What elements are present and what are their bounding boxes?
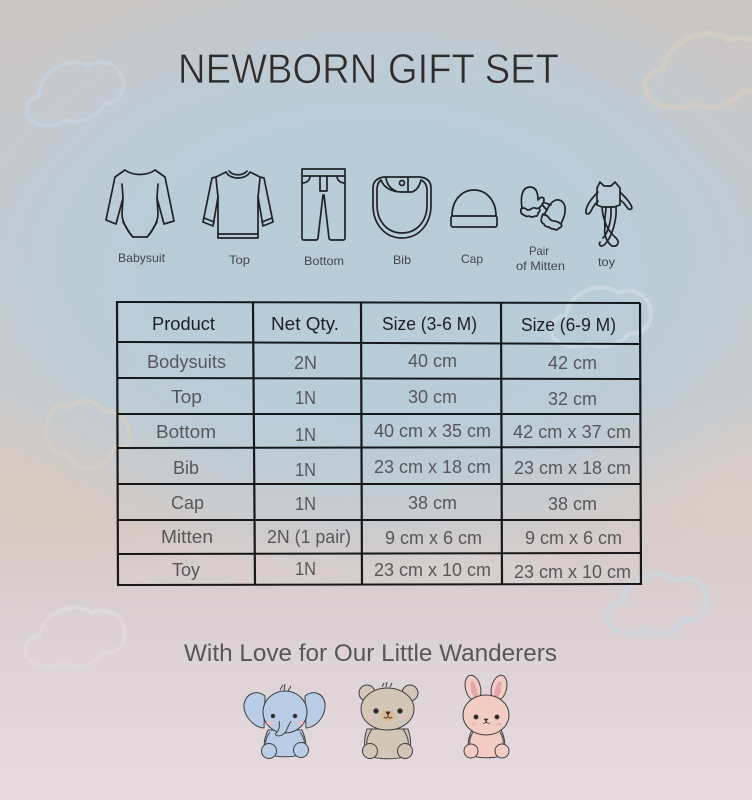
table row: Bib — [173, 457, 631, 480]
table row: Mitten: Mitten — [161, 527, 213, 547]
label: Bottom: Bottom — [304, 254, 344, 268]
table row: Bodysuits: 42 cm — [548, 353, 597, 373]
table row: Bib: Bib — [173, 458, 199, 478]
table row: Bottom: Bottom — [156, 422, 216, 442]
table row: Bib: 1N — [295, 460, 316, 480]
label: Pair of Mitten: of Mitten — [516, 259, 565, 273]
table row: Bottom: 1N — [295, 425, 316, 445]
icon: bottom trousers — [302, 169, 345, 240]
table row: Toy: Toy — [172, 560, 200, 580]
table row: Cap — [171, 493, 597, 514]
table header row — [152, 314, 616, 335]
table header row: Size (3-6 M) — [382, 314, 477, 334]
cloud: lower right — [607, 574, 707, 634]
title: NEWBORN GIFT SET — [178, 45, 559, 92]
table row: Top: Top — [171, 387, 202, 407]
table row: Top: 30 cm — [408, 387, 457, 407]
illustration: elephant — [244, 684, 325, 758]
size table — [117, 301, 641, 585]
table row: Top: 32 cm — [548, 389, 597, 409]
icon: top sweater — [203, 171, 273, 238]
label: toy: toy — [598, 255, 615, 269]
table row: Bottom: 40 cm x 35 cm — [374, 421, 491, 441]
table header row: Net Qty. — [271, 314, 339, 334]
table grid — [117, 301, 641, 585]
icon: toy — [586, 182, 632, 246]
icon row — [106, 169, 632, 273]
cloud: middle left — [41, 386, 134, 484]
label: Top: Top — [229, 253, 250, 267]
table header row: Size (6-9 M) — [521, 315, 616, 335]
label: Babysuit: Babysuit — [118, 251, 166, 265]
label: Pair of Mitten: Pair — [529, 244, 549, 258]
illustration: bunny — [463, 674, 509, 758]
table row: Toy — [172, 559, 631, 582]
table row: Cap: 38 cm — [408, 493, 457, 513]
table row: Mitten: 2N (1 pair) — [267, 527, 351, 547]
table row: Top — [171, 387, 597, 409]
cloud: top right — [645, 34, 752, 108]
table row: Toy: 23 cm x 10 cm — [514, 562, 631, 582]
illustration: bear — [359, 682, 418, 759]
table row: Toy: 1N — [295, 559, 316, 579]
table row: Top: 1N — [295, 388, 316, 408]
table row: Mitten: 9 cm x 6 cm — [385, 528, 482, 548]
label: Bib: Bib — [393, 253, 411, 267]
table row: Cap: Cap — [171, 493, 204, 513]
cloud: lower left — [25, 607, 125, 667]
table row: Bottom — [156, 421, 631, 445]
label: Cap: Cap — [461, 252, 483, 266]
table row: Bottom: 42 cm x 37 cm — [513, 422, 631, 442]
cloud: top left — [21, 56, 128, 128]
table row: Mitten — [161, 527, 622, 548]
icon: bib — [373, 177, 431, 238]
table row: Cap: 1N — [295, 494, 316, 514]
icon: mittens — [521, 187, 565, 230]
tagline: With Love for Our Little Wanderers — [184, 640, 557, 667]
table row: Toy: 23 cm x 10 cm — [374, 560, 491, 580]
table row: Bib: 23 cm x 18 cm — [374, 457, 491, 477]
table row: Bodysuits: Bodysuits — [147, 352, 226, 372]
table row: Bib: 23 cm x 18 cm — [514, 458, 631, 478]
icon: babysuit — [106, 170, 174, 237]
table row: Cap: 38 cm — [548, 494, 597, 514]
table header row: Product — [152, 314, 215, 334]
table row: Mitten: 9 cm x 6 cm — [525, 528, 622, 548]
table row: Bodysuits: 40 cm — [408, 351, 457, 371]
table row: Bodysuits: 2N — [294, 353, 317, 373]
cloud: behind table right — [551, 287, 651, 347]
table row: Bodysuits — [147, 351, 597, 373]
icon: cap — [451, 190, 497, 227]
